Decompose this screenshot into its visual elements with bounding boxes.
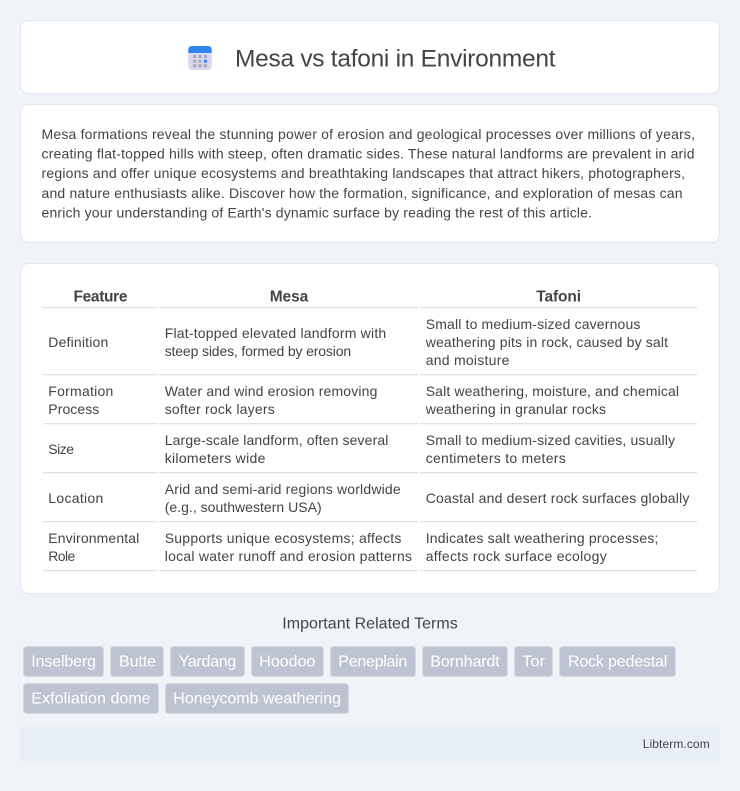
- table row: definition: steep sides, formed by erosion: [165, 343, 351, 359]
- tag: Tor: Tor: [522, 654, 546, 670]
- tag: Honeycomb weathering: Honeycomb weathering: [173, 690, 341, 708]
- table row: size: centimeters to meters: [426, 450, 566, 466]
- table row: size: [48, 432, 675, 466]
- text block: introduction paragraph: and nature enthusiasts alike. Discover how the formation, significance, and exploration of mesas can: [42, 185, 682, 201]
- table row: environmental role: Environmental: [48, 530, 139, 546]
- title: Mesa vs tafoni in Environment: [235, 46, 556, 72]
- tag: Hoodoo: [252, 646, 324, 676]
- table row: formation process: [48, 383, 679, 417]
- table row: formation process: Salt weathering, moisture, and chemical: [426, 383, 679, 399]
- table row: formation process: Water and wind erosion removing: [165, 383, 377, 399]
- table row: size: Small to medium-sized cavities, usually: [426, 432, 675, 448]
- table row: definition: and moisture: [426, 352, 510, 368]
- table row: definition: Flat-topped elevated landform with: [165, 325, 386, 341]
- table row: size: kilometers wide: [165, 450, 266, 466]
- tag: Exfoliation dome: Exfoliation dome: [31, 690, 151, 708]
- table row: formation process: Process: [48, 401, 99, 417]
- tag: Yardang: Yardang: [179, 654, 236, 670]
- table row: definition: Small to medium-sized cavernous: [426, 316, 640, 332]
- icon: calendar: [188, 46, 212, 70]
- table header row: Feature: [74, 288, 128, 306]
- table row: location: Location: [48, 490, 103, 506]
- table row: size: Large-scale landform, often several: [165, 432, 388, 448]
- table row: definition: [48, 316, 668, 368]
- text block: introduction paragraph: [42, 126, 695, 220]
- table row: environmental role: Role: [48, 548, 76, 564]
- tags: related terms: [24, 646, 676, 714]
- tag: Rock pedestal: [560, 646, 676, 676]
- table header row: Mesa: [270, 288, 309, 306]
- table row: formation process: weathering in granular rocks: [425, 401, 606, 417]
- tag: Yardang: [170, 646, 244, 676]
- table row: environmental role: [48, 530, 658, 564]
- panel: comparison table: [20, 264, 720, 594]
- table row: environmental role: Indicates salt weathering processes;: [426, 530, 658, 546]
- table row: location: [48, 481, 689, 515]
- table header row: Tafoni: [536, 288, 581, 306]
- table row: location: Arid and semi-arid regions worldwide: [165, 481, 401, 497]
- table row: environmental role: local water runoff and erosion patterns: [165, 548, 412, 564]
- tag: Rock pedestal: Rock pedestal: [568, 654, 667, 670]
- table row: location: (e.g., southwestern USA): [165, 499, 322, 515]
- footer credit: Libterm.com: [643, 737, 710, 751]
- tag: Hoodoo: Hoodoo: [259, 654, 315, 670]
- table header row: [74, 288, 581, 306]
- table row: formation process: softer rock layers: [165, 401, 275, 417]
- tag: Exfoliation dome: [24, 684, 158, 714]
- tag: Tor: [514, 646, 552, 676]
- tag: Bornhardt: Bornhardt: [430, 654, 500, 670]
- tag: Butte: [110, 646, 164, 676]
- table row: size: Size: [48, 441, 74, 457]
- tag: Inselberg: Inselberg: [31, 654, 96, 670]
- tag: Butte: Butte: [119, 654, 156, 670]
- footer: [20, 727, 720, 761]
- table row: environmental role: affects rock surface ecology: [426, 548, 607, 564]
- text block: introduction paragraph: Mesa formations reveal the stunning power of erosion and geological processes over millions of years,: [42, 126, 695, 142]
- heading: important related terms: Important Related Terms: [282, 616, 458, 632]
- tag: Peneplain: Peneplain: [338, 654, 407, 670]
- table row: location: Coastal and desert rock surfaces globally: [426, 490, 689, 506]
- table row: definition: Definition: [48, 334, 108, 350]
- table row: environmental role: Supports unique ecosystems; affects: [165, 530, 401, 546]
- text block: introduction paragraph: enrich your understanding of Earth's dynamic surface by reading the rest of this article.: [42, 204, 592, 220]
- table row: definition: weathering pits in rock, caused by salt: [425, 334, 668, 350]
- panel: introduction: [20, 104, 720, 242]
- tag: Honeycomb weathering: [166, 684, 348, 714]
- tag: Peneplain: [330, 646, 416, 676]
- text block: introduction paragraph: regions and offer unique ecosystems and breathtaking landscapes that attract hikers, photographers,: [42, 165, 685, 181]
- tag: Inselberg: [24, 646, 104, 676]
- tag: Bornhardt: [422, 646, 508, 676]
- panel: header: [20, 20, 720, 94]
- text block: introduction paragraph: creating flat-topped hills with steep, often dramatic sides. These natural landforms are prevalent in arid: [42, 146, 694, 162]
- table row: formation process: Formation: [48, 383, 113, 399]
